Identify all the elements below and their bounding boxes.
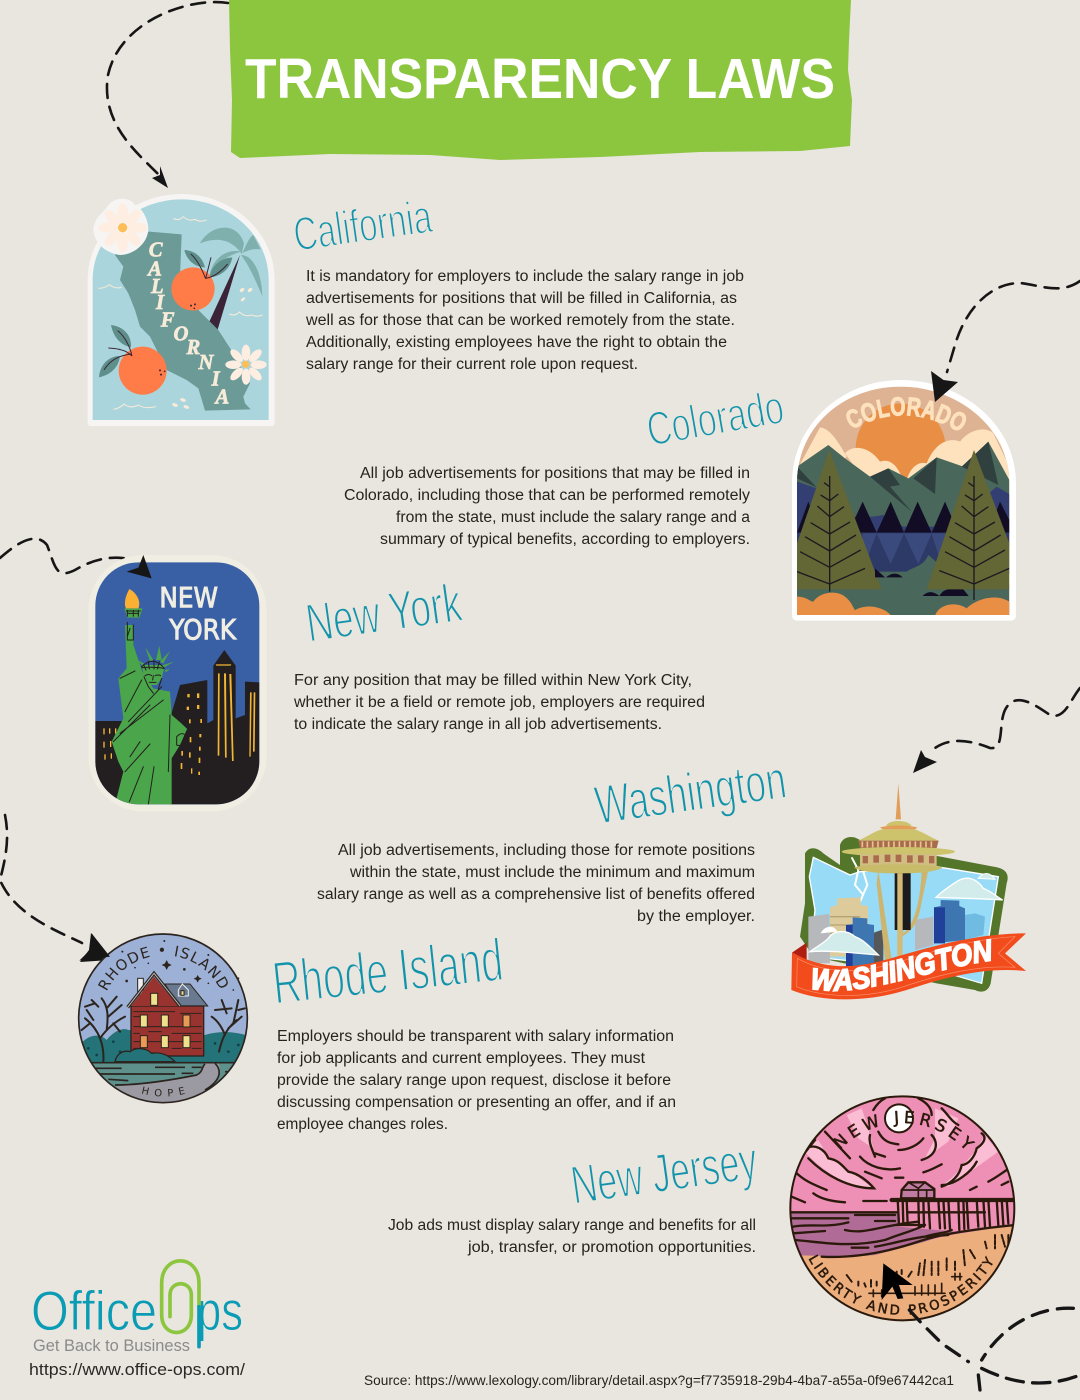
text: New York: to indicate the salary range in all job advertisements. xyxy=(294,716,662,733)
text: Rhode Island: employee changes roles. xyxy=(277,1116,448,1133)
text: Washington: by the employer. xyxy=(637,908,755,925)
state name: COLORADO xyxy=(846,396,966,430)
text: California: It is mandatory for employers to include the salary range in job xyxy=(306,268,744,285)
text: Colorado: summary of typical benefits, according to employers. xyxy=(380,531,750,548)
sticker: New Jersey: LIBERTY AND PROSPERITY xyxy=(808,1254,993,1315)
banner xyxy=(792,943,807,960)
sticker: Washington xyxy=(791,784,1026,1000)
state name letters: A xyxy=(146,259,162,281)
text: Washington: within the state, must include the minimum and maximum xyxy=(349,864,755,881)
state name letters xyxy=(146,240,229,408)
text: Washington: salary range as well as a comprehensive list of benefits offered xyxy=(317,886,755,903)
heading: Colorado: Colorado xyxy=(643,380,788,456)
state name letters: F xyxy=(160,309,175,331)
text: New York: For any position that may be filled within New York City, xyxy=(294,672,692,689)
text: California: advertisements for positions that will be filled in California, as xyxy=(306,290,737,307)
text: Rhode Island: provide the salary range upon request, disclose it before xyxy=(277,1072,671,1089)
paperclip xyxy=(162,1261,199,1347)
state name letters: I xyxy=(211,369,221,391)
text: California xyxy=(305,268,744,373)
text: Rhode Island xyxy=(277,1028,676,1133)
text: Rhode Island: discussing compensation or presenting an offer, and if an xyxy=(277,1094,676,1111)
text: Rhode Island: Employers should be transparent with salary information xyxy=(277,1028,674,1045)
sticker: California xyxy=(88,194,275,426)
text: California: salary range for their current role upon request. xyxy=(306,356,638,373)
state name letters: N xyxy=(198,352,215,374)
state name: YORK xyxy=(168,613,237,646)
sticker: Rhode Island: HOPE xyxy=(142,1086,185,1096)
arrow: to Colorado xyxy=(931,281,1080,402)
house xyxy=(115,973,208,1062)
title banner xyxy=(229,0,852,160)
state name letters: I xyxy=(155,292,165,314)
text: Washington: All job advertisements, including those for remote positions xyxy=(338,842,755,859)
heading: California: California xyxy=(290,189,436,261)
sticker: New York xyxy=(95,555,260,804)
arrow: to New Jersey xyxy=(909,1308,1080,1390)
cursor arrow xyxy=(882,1263,913,1300)
arrow: to New York xyxy=(0,539,152,579)
flowers xyxy=(93,199,267,385)
text: New Jersey xyxy=(388,1217,756,1256)
website url: https://www.office-ops.com/ xyxy=(29,1360,245,1379)
heading: Washington: Washington xyxy=(591,750,790,836)
sticker: Colorado xyxy=(792,380,1016,620)
skyline xyxy=(808,897,985,967)
source: Source: https://www.lexology.com/library/detail.aspx?g=f7735918-29b4-4ba7-a55a-0f9e67442ca1 xyxy=(364,1373,954,1388)
arrow: to California xyxy=(107,2,228,188)
sticker: Rhode Island: RHODE • ISLAND xyxy=(98,946,228,990)
logo wordmark: Office xyxy=(31,1279,157,1342)
sticker: New Jersey xyxy=(789,1095,1016,1322)
state name letters: C xyxy=(149,240,163,262)
heading: New York: New York xyxy=(302,573,466,654)
logo: OfficeOps xyxy=(31,1261,243,1355)
tagline: Get Back to Business xyxy=(33,1337,190,1355)
text: New Jersey: job, transfer, or promotion opportunities. xyxy=(467,1239,756,1256)
space needle xyxy=(842,783,955,960)
text: Colorado: Colorado, including those that can be performed remotely xyxy=(344,487,750,504)
arrow: to Rhode Island xyxy=(0,815,110,962)
arrowhead xyxy=(127,555,152,578)
text: New York: whether it be a field or remote job, employers are required xyxy=(293,694,705,711)
sticker: New Jersey: NEW JERSEY xyxy=(833,1110,976,1148)
text: Washington xyxy=(317,842,755,925)
text: California: Additionally, existing employees have the right to obtain the xyxy=(306,334,727,351)
state name letters: R xyxy=(185,337,200,359)
state name letters: O xyxy=(174,323,189,345)
text: New Jersey: Job ads must display salary range and benefits for all xyxy=(388,1217,756,1234)
heading: New Jersey: New Jersey xyxy=(567,1130,761,1216)
text: Colorado xyxy=(344,465,750,548)
clouds xyxy=(810,932,878,955)
trees xyxy=(82,997,245,1062)
title: TRANSPARENCY LAWS xyxy=(245,47,835,111)
heading: Rhode Island: Rhode Island xyxy=(269,926,506,1017)
state name: WASHINGTON xyxy=(812,938,992,992)
state name xyxy=(159,581,237,646)
text: California: well as for those that can be worked remotely from the state. xyxy=(305,312,735,329)
text: Colorado: from the state, must include the salary range and a xyxy=(396,509,750,526)
text: Rhode Island: for job applicants and current employees. They must xyxy=(277,1050,646,1067)
sticker: Rhode Island xyxy=(78,933,248,1104)
text: Colorado: All job advertisements for positions that may be filled in xyxy=(360,465,750,482)
text: New York xyxy=(293,672,705,733)
state name letters: A xyxy=(213,386,229,408)
state name: NEW xyxy=(159,581,218,614)
arrowhead xyxy=(79,933,110,961)
state name letters: L xyxy=(150,276,164,298)
arrow: to Washington xyxy=(913,688,1080,773)
logo: OfficeOps: ps xyxy=(197,1279,243,1342)
